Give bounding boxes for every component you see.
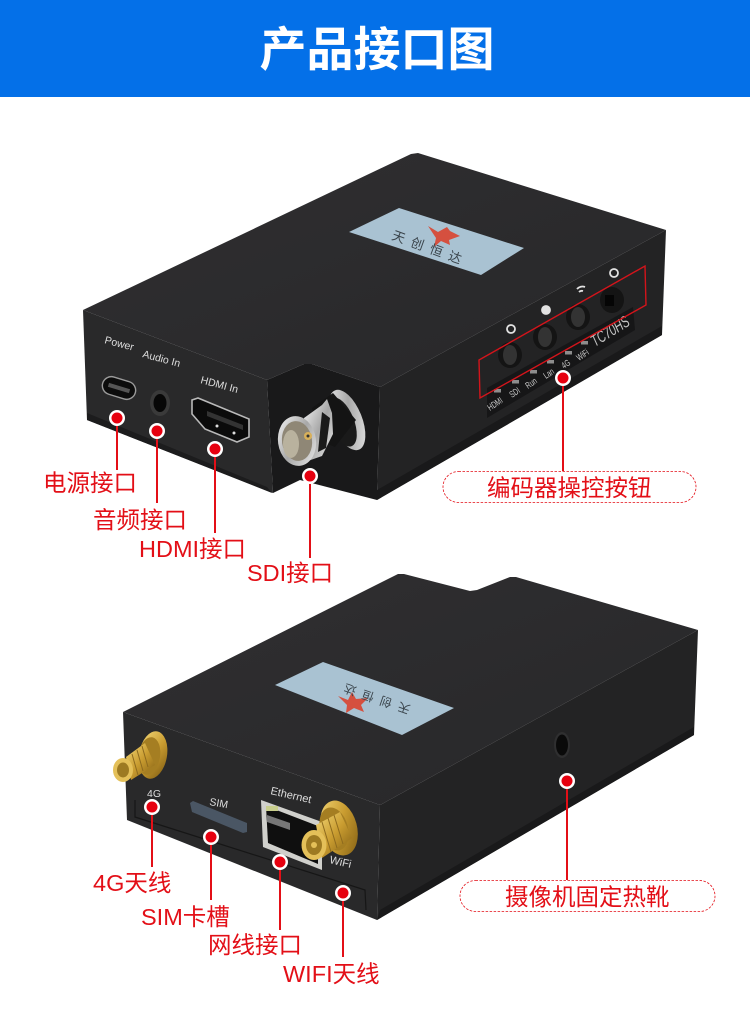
SDI notch recess (267, 364, 380, 500)
callout: Ethernet connector (208, 854, 302, 958)
port label: SIM: SIM (208, 796, 229, 811)
LED labels: HDMI (485, 395, 505, 413)
LED labels: Run (523, 376, 539, 391)
HDMI port (192, 398, 249, 442)
label: HDMI: HDMI接口 (139, 536, 246, 562)
device side face (377, 630, 698, 920)
label: control buttons: 编码器操控按钮 (487, 475, 652, 501)
callout: encoder control buttons (443, 370, 696, 502)
brand logo (338, 692, 368, 713)
port label: 4G: 4G (147, 788, 161, 800)
brand label plate (349, 208, 524, 275)
audio jack (150, 390, 170, 416)
brand logo (428, 226, 460, 247)
device: encoder rear view (113, 574, 698, 920)
label: 4G antenna: 4G天线 (93, 870, 171, 896)
WiFi antenna connector (302, 796, 364, 860)
4G antenna connector (113, 729, 171, 782)
device: encoder front view (83, 153, 666, 500)
callout: WiFi antenna (283, 885, 380, 987)
device front face (123, 712, 380, 920)
device right face (377, 230, 666, 500)
callout: SIM slot (141, 829, 230, 930)
label: Ethernet: 网线接口 (208, 932, 302, 958)
label: power: 电源接口 (43, 470, 137, 496)
LED labels: 4G (559, 357, 572, 371)
label: hot shoe: 摄像机固定热靴 (505, 884, 670, 910)
callout: HDMI connector (139, 441, 246, 562)
BNC connector for SDI (275, 385, 373, 468)
title: 产品接口图 (260, 11, 494, 80)
callout: SDI connector (247, 468, 333, 586)
brand name: 天创恒达 (390, 228, 470, 269)
panel seam (135, 800, 366, 910)
LED indicators (494, 341, 588, 392)
USB-C port (100, 374, 138, 402)
port label: Power: Power (103, 334, 136, 354)
device top face (83, 153, 666, 387)
LED status plate (487, 307, 635, 418)
device top face (123, 574, 698, 805)
LED labels: WiFi (574, 347, 591, 363)
label: SIM slot: SIM卡槽 (141, 904, 230, 930)
tripod screw hole (554, 732, 570, 758)
callout: audio connector (93, 423, 187, 533)
LED labels (485, 311, 633, 413)
LED labels: TC70HS (587, 311, 633, 350)
port label: WiFi: WiFi (328, 854, 352, 871)
brand name: 天创恒达 (336, 678, 412, 716)
brand label plate (275, 662, 454, 735)
label: audio: 音频接口 (93, 507, 187, 533)
LED labels: SDI (507, 385, 522, 400)
RJ45 Ethernet port (261, 800, 322, 870)
dashed pill (460, 880, 715, 912)
port label: Ethernet: Ethernet (269, 785, 313, 806)
label: WiFi antenna: WIFI天线 (283, 961, 380, 987)
button icons (507, 269, 618, 333)
port label: Audio In: Audio In (141, 348, 182, 370)
dashed pill (443, 472, 696, 502)
SIM slot (190, 801, 247, 833)
callout: camera hot shoe mount (460, 773, 715, 912)
callout: power connector (43, 410, 137, 496)
label: SDI: SDI接口 (247, 560, 333, 586)
callout: 4G antenna (93, 799, 171, 896)
control buttons (498, 287, 624, 368)
port label: HDMI In: HDMI In (199, 374, 240, 396)
LED labels: Lan (541, 366, 556, 381)
device front face (83, 310, 273, 493)
red highlight frame (479, 266, 646, 398)
header banner (0, 0, 750, 97)
